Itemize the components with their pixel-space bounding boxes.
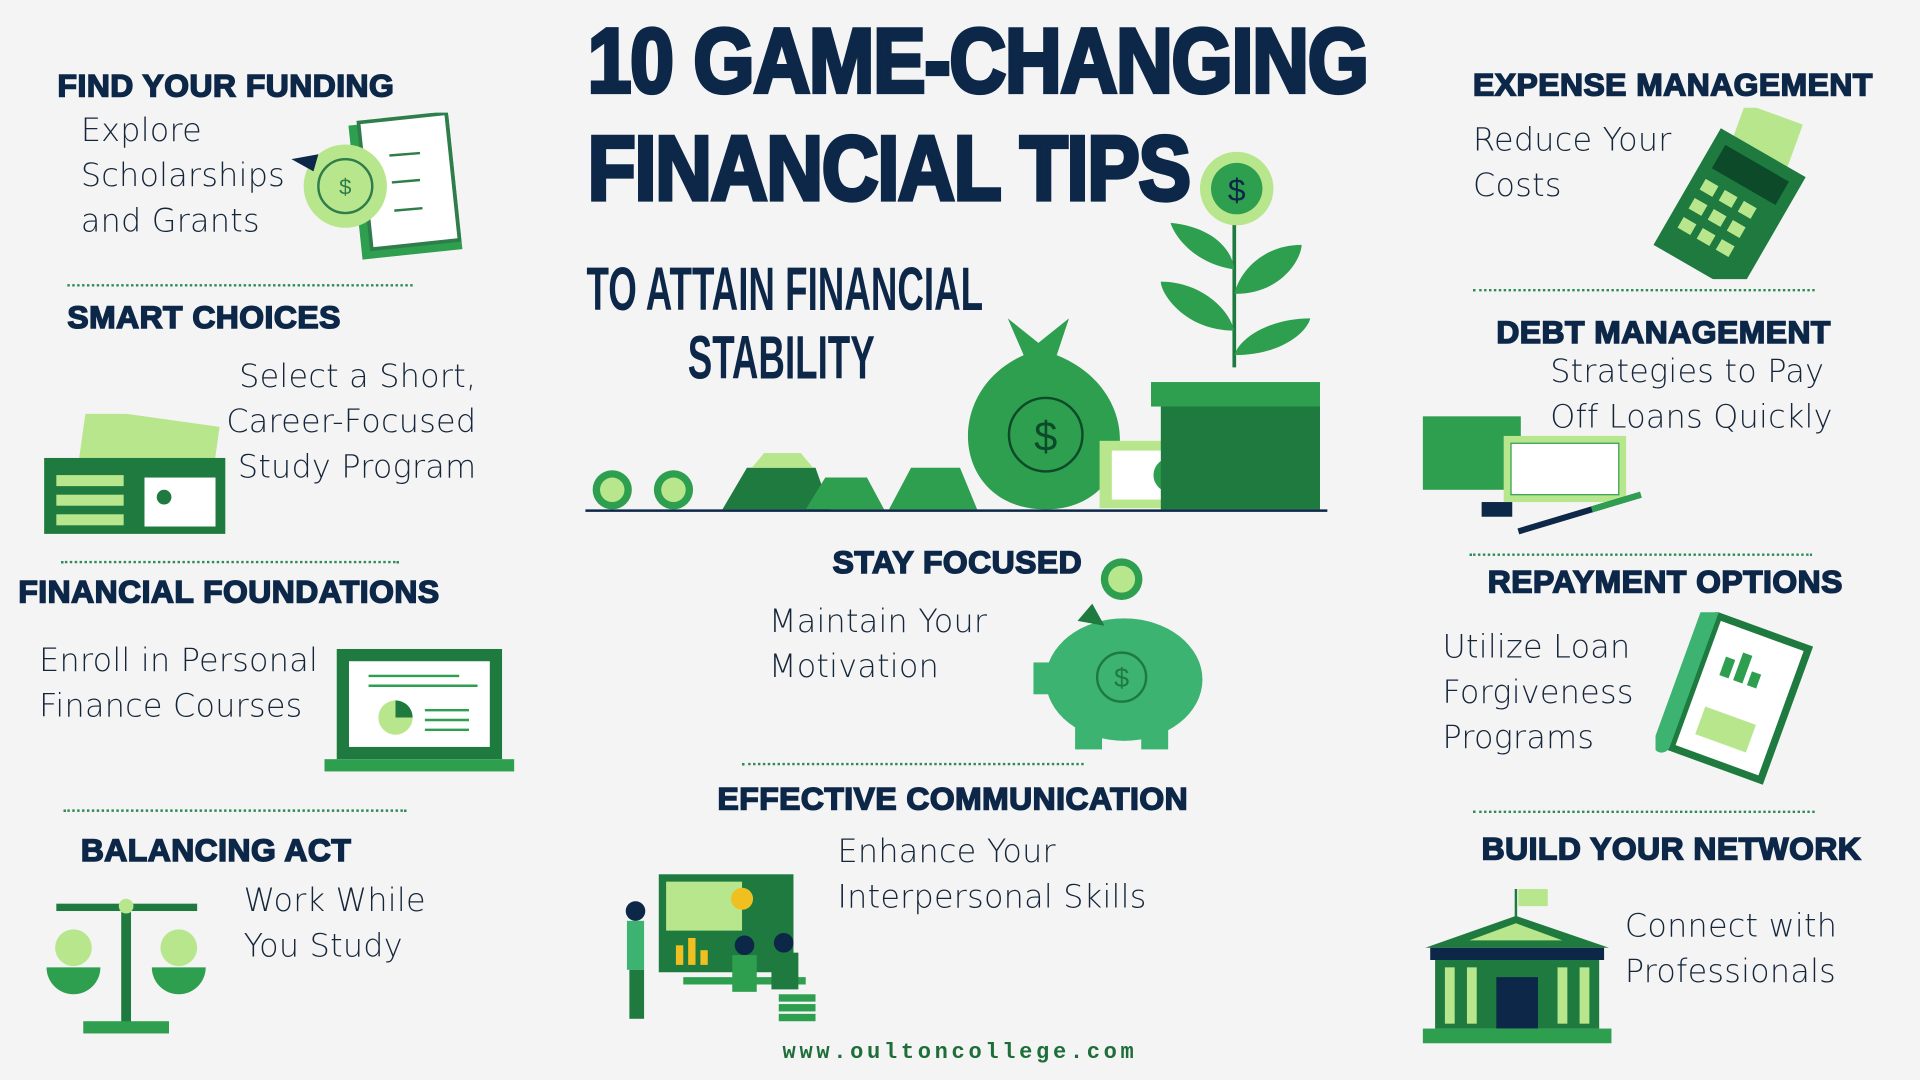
icon: report document: [1656, 612, 1813, 785]
text: balancing act: Work While: [244, 883, 426, 920]
illustration: money bag, gold, plant: $: [1034, 413, 1057, 460]
text: debt management: Off Loans Quickly: [1550, 399, 1833, 436]
heading: build your network: BUILD YOUR NETWORK: [1482, 830, 1861, 867]
text: stay focused: [769, 604, 987, 686]
title: 10 GAME-CHANGING: [588, 10, 1368, 111]
heading: find your funding: FIND YOUR FUNDING: [58, 67, 394, 104]
text: build your network: Professionals: [1625, 954, 1836, 991]
heading: debt management: DEBT MANAGEMENT: [1496, 313, 1831, 350]
text: balancing act: You Study: [244, 928, 403, 965]
text: repayment options: Forgiveness: [1442, 675, 1634, 711]
text: financial foundations: Enroll in Personal: [39, 643, 318, 680]
subtitle: [586, 255, 983, 392]
title: [588, 10, 1368, 219]
text: stay focused: Motivation: [769, 649, 939, 686]
text: expense management: [1473, 122, 1672, 204]
icon: laptop: [324, 648, 514, 772]
text: find your funding: Explore: [81, 113, 202, 149]
heading: smart choices: SMART CHOICES: [67, 299, 341, 336]
text: debt management: [1550, 354, 1833, 436]
icon: target checklist: [292, 112, 462, 260]
icon: piggy bank: [1033, 558, 1202, 750]
text: smart choices: Study Program: [238, 449, 476, 486]
text: repayment options: Programs: [1442, 720, 1594, 757]
heading: stay focused: STAY FOCUSED: [833, 544, 1082, 580]
text: expense management: Reduce Your: [1473, 122, 1672, 159]
text: stay focused: Maintain Your: [769, 604, 987, 640]
text: find your funding: Scholarships: [81, 158, 285, 195]
icon: building: [1422, 889, 1612, 1044]
heading: expense management: EXPENSE MANAGEMENT: [1473, 66, 1873, 103]
icon: wallet and check: [1422, 416, 1642, 534]
text: expense management: Costs: [1473, 168, 1562, 204]
text: debt management: Strategies to Pay: [1550, 354, 1824, 391]
text: financial foundations: Finance Courses: [39, 688, 303, 725]
text: effective communication: [838, 834, 1147, 916]
heading: effective communication: EFFECTIVE COMMUNICATION: [718, 780, 1188, 817]
text: financial foundations: [39, 643, 318, 725]
text: smart choices: Select a Short,: [239, 359, 476, 396]
subtitle: TO ATTAIN FINANCIAL: [587, 255, 983, 323]
text: find your funding: and Grants: [81, 203, 260, 240]
heading: financial foundations: FINANCIAL FOUNDATIONS: [18, 573, 440, 610]
heading: balancing act: BALANCING ACT: [81, 831, 351, 868]
text: find your funding: [81, 113, 285, 240]
text: smart choices: Career-Focused: [226, 404, 476, 441]
icon: team at board: [626, 874, 816, 1022]
text: repayment options: [1442, 629, 1634, 757]
icon: scale: [46, 898, 206, 1034]
text: build your network: Connect with: [1625, 909, 1837, 945]
text: repayment options: Utilize Loan: [1442, 629, 1630, 666]
text: build your network: [1625, 909, 1837, 991]
illustration: money bag, gold, plant: [585, 152, 1328, 512]
subtitle: STABILITY: [688, 323, 875, 392]
illustration: money bag, gold, plant: $: [1228, 172, 1246, 208]
footer url: www.oultoncollege.com: [783, 1041, 1137, 1065]
text: balancing act: [244, 883, 426, 965]
icon: target checklist: $: [339, 175, 351, 200]
heading: repayment options: REPAYMENT OPTIONS: [1488, 563, 1843, 600]
text: effective communication: Enhance Your: [838, 834, 1056, 871]
text: smart choices: [226, 359, 476, 486]
text: effective communication: Interpersonal Skills: [838, 879, 1147, 916]
icon: calculator: [1654, 108, 1806, 280]
icon: piggy bank: $: [1114, 663, 1129, 693]
icon: wallet: [44, 414, 226, 534]
title: FINANCIAL TIPS: [588, 118, 1190, 219]
